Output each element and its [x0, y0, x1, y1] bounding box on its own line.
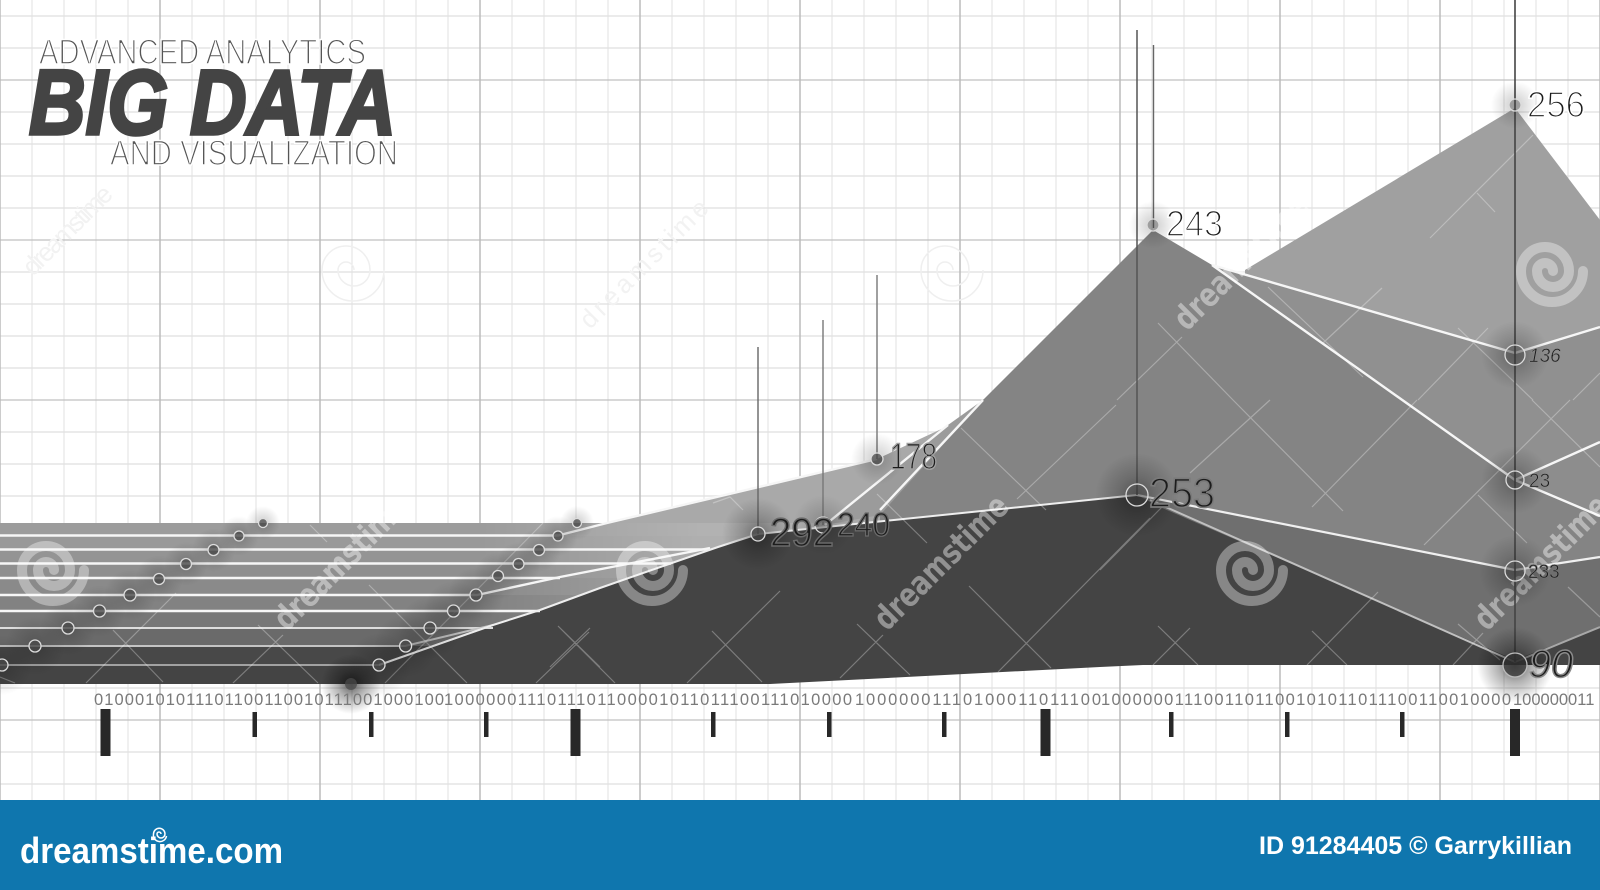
value 256: 256	[1527, 84, 1585, 125]
faint watermarks on white background: dreamstime	[16, 179, 119, 281]
white contour lines	[0, 265, 1600, 665]
polygon: small wedge right of 23	[1515, 442, 1600, 516]
binary digit axis	[94, 691, 1594, 709]
value 240: 240	[837, 506, 890, 543]
value 233: 233	[1528, 562, 1560, 583]
polygon: main peak 243	[880, 230, 1600, 572]
tick marks	[100, 709, 1520, 756]
title line: and visualization: AND VISUALIZATION	[110, 134, 398, 173]
footer logo text: dreamstime.com	[20, 830, 283, 871]
value 178: 178	[890, 436, 937, 477]
value 90: 90	[1529, 643, 1573, 686]
data value labels	[770, 84, 1585, 686]
polygon: second layer through 136	[1200, 265, 1600, 560]
footer bar	[0, 800, 1600, 890]
vertical data stems	[758, 0, 1515, 662]
binary digit axis: 1000000111001101100101011011100110010000	[1101, 691, 1511, 709]
polygon: left band and light slope	[0, 429, 946, 684]
polygon: mid-dark layer	[1137, 495, 1600, 662]
title block	[29, 33, 398, 173]
watermark diagonal cross lines	[0, 135, 1600, 683]
watermark text: dreamstime	[265, 486, 416, 638]
data nodes	[0, 99, 1527, 690]
faint watermarks on white background: dreamstime	[573, 193, 714, 334]
binary digit axis: 1000000111011101100001011011100111010000	[444, 691, 852, 709]
polygon: narrow strip near 178	[825, 400, 983, 525]
title line: advanced analytics: ADVANCED ANALYTICS	[39, 33, 366, 72]
polygon: top light layer with peak 256	[1245, 108, 1600, 420]
value 253: 253	[1149, 469, 1215, 516]
polygon: dark base layer	[351, 495, 1600, 684]
faint watermarks on white background	[16, 179, 983, 334]
watermark text: dreamstime	[865, 486, 1016, 638]
binary digit axis: 10000001110100011011100	[855, 691, 1101, 709]
watermark text	[265, 186, 1600, 638]
binary digit axis: 01000101011101100110010111001000100	[94, 691, 444, 709]
area chart: layered polygons	[0, 108, 1600, 684]
value 292: 292	[770, 511, 834, 555]
value 136: 136	[1529, 346, 1561, 367]
watermark text: dreamstime	[1165, 186, 1316, 338]
value 243: 243	[1166, 203, 1223, 244]
title: big data: BIG DATA	[29, 52, 396, 154]
node shadows	[0, 81, 1553, 714]
value 23: 23	[1529, 471, 1550, 492]
binary digit axis: 100000011	[1513, 691, 1594, 709]
watermark spirals	[22, 247, 1583, 601]
footer image credit: ID 91284405 © Garrykillian	[1259, 832, 1572, 860]
footer logo spiral	[153, 828, 166, 842]
